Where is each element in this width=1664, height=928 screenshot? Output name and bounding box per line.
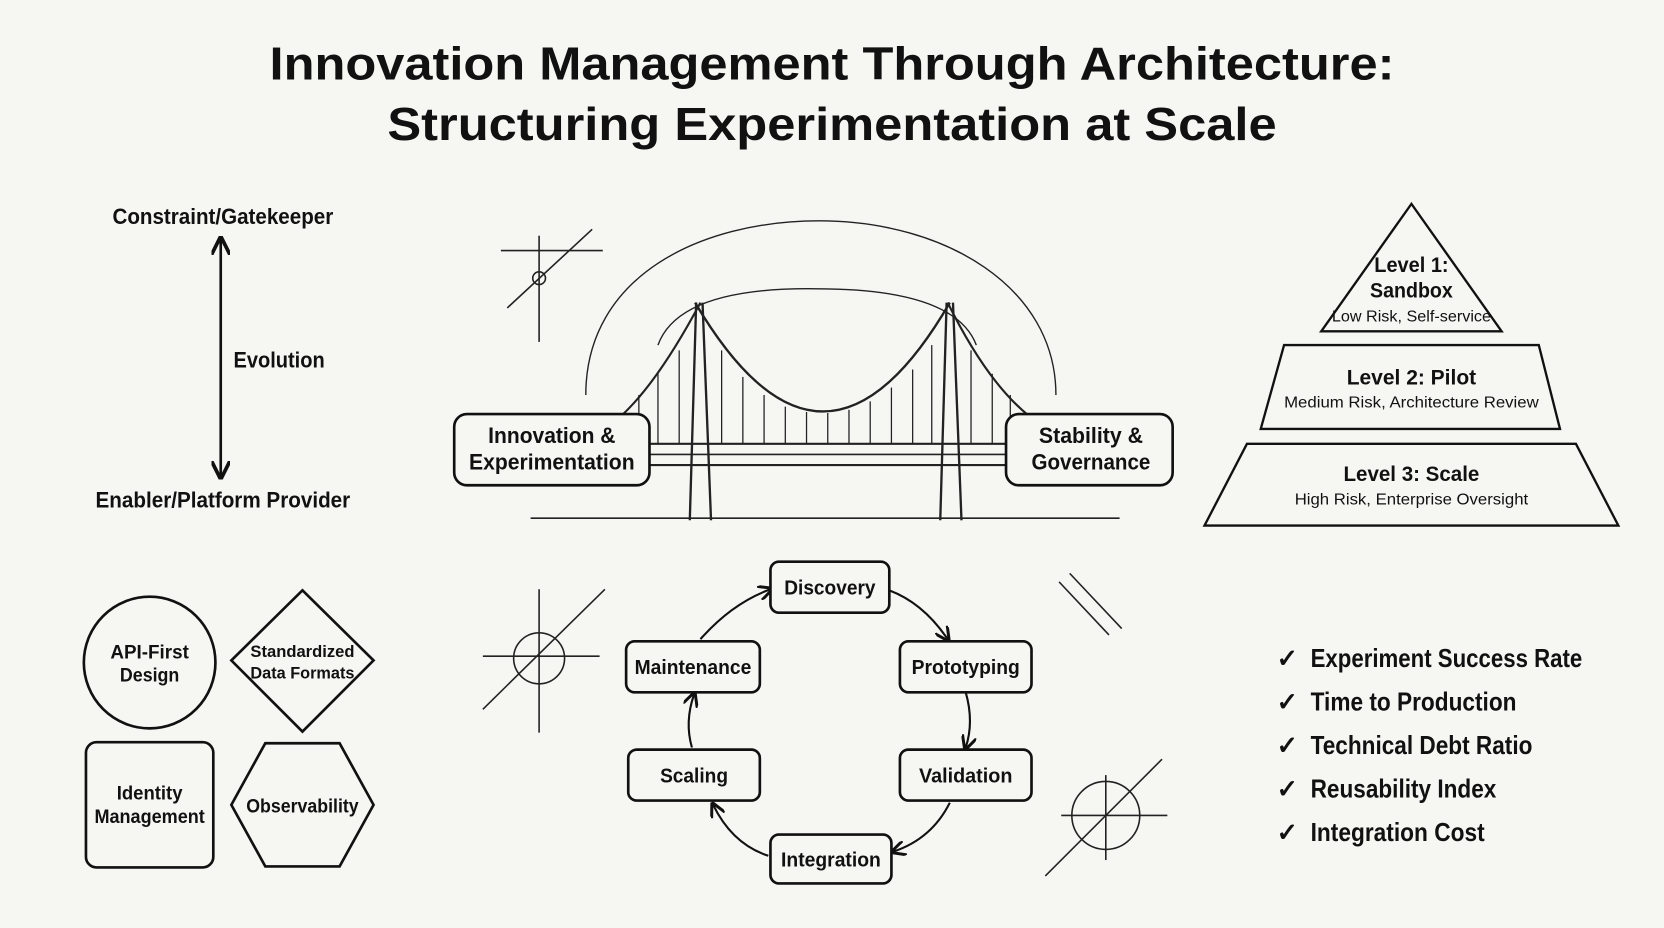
bridge illustration: [531, 221, 1120, 520]
step: Maintenance: Maintenance: [635, 657, 751, 679]
level 1: Level 1:: [1374, 254, 1449, 277]
box: Stability & Governance: [1006, 414, 1173, 485]
panel: role evolution axis: Constraint/Gatekeeper: [112, 204, 334, 229]
title: [270, 38, 1394, 150]
shape: Standardized Data Formats: [231, 590, 374, 732]
checklist: metrics: Reusability Index: [1311, 775, 1496, 803]
shape: Standardized Data Formats: Data Formats: [250, 663, 354, 682]
step: Maintenance: [626, 641, 760, 692]
shape: API-First Design: Design: [120, 666, 179, 687]
checklist: metrics: ✓: [1277, 645, 1298, 673]
icon: crosshair bottom-right: [1045, 759, 1167, 876]
checklist: metrics: Technical Debt Ratio: [1311, 732, 1532, 760]
level 3: Level 3: Scale: [1344, 463, 1480, 486]
box: Innovation & Experimentation: Innovation &: [488, 423, 616, 448]
step: Scaling: [628, 750, 760, 801]
level 1: [1321, 204, 1502, 331]
panel: platform capabilities shapes: [84, 590, 374, 867]
icon: crosshair top: [501, 229, 603, 342]
level 1: Low Risk, Self-service: [1332, 309, 1491, 326]
checklist: metrics: ✓: [1277, 688, 1298, 716]
step: Prototyping: Prototyping: [912, 657, 1020, 679]
box: Stability & Governance: Stability &: [1039, 423, 1143, 448]
step: Validation: Validation: [919, 766, 1012, 788]
level 2: Level 2: Pilot: [1347, 366, 1476, 389]
panel: role evolution axis: Evolution: [233, 347, 325, 372]
title: Innovation Management Through Architecture:: [270, 38, 1394, 90]
shape: Identity Management: Identity: [117, 784, 183, 805]
checklist: metrics: ✓: [1277, 732, 1298, 760]
shape: Observability: Observability: [246, 796, 359, 817]
box: Innovation & Experimentation: Experimentation: [469, 449, 635, 474]
step: Discovery: [770, 562, 889, 613]
level 1: Sandbox: [1370, 279, 1453, 302]
shape: Standardized Data Formats: Standardized: [250, 642, 354, 661]
cycle arrows: [689, 589, 970, 856]
level 2: Medium Risk, Architecture Review: [1284, 395, 1539, 412]
step: Validation: [900, 750, 1032, 801]
arrow: bidirectional evolution: [219, 240, 222, 476]
step: Integration: Integration: [781, 849, 881, 871]
level 3: High Risk, Enterprise Oversight: [1295, 491, 1529, 508]
checklist: metrics: ✓: [1277, 819, 1298, 847]
title: Structuring Experimentation at Scale: [387, 98, 1277, 150]
shape: Observability: [231, 743, 374, 866]
step: Prototyping: [900, 641, 1032, 692]
step: Integration: [770, 835, 891, 883]
checklist: metrics: [1277, 645, 1582, 847]
pyramid: risk levels: [1204, 204, 1618, 526]
shape: API-First Design: API-First: [110, 642, 190, 663]
cycle diagram: innovation lifecycle: [626, 562, 1032, 883]
checklist: metrics: ✓: [1277, 775, 1298, 803]
shape: API-First Design: [84, 597, 215, 728]
step: Discovery: Discovery: [784, 578, 876, 600]
checklist: metrics: Experiment Success Rate: [1311, 645, 1582, 673]
shape: Identity Management: [86, 742, 213, 867]
box: Stability & Governance: Governance: [1032, 449, 1150, 474]
shape: Identity Management: Management: [94, 807, 205, 828]
checklist: metrics: Time to Production: [1311, 688, 1516, 716]
step: Scaling: Scaling: [660, 766, 728, 788]
box: Innovation & Experimentation: [454, 414, 649, 485]
level 3: [1204, 444, 1618, 526]
icon: crosshair bottom-left: [483, 589, 605, 733]
checklist: metrics: Integration Cost: [1311, 819, 1485, 847]
panel: role evolution axis: Enabler/Platform Provider: [96, 488, 351, 513]
level 2: [1261, 345, 1560, 429]
panel: role evolution axis: [96, 204, 351, 513]
icon: hatch marks: [1059, 573, 1122, 635]
